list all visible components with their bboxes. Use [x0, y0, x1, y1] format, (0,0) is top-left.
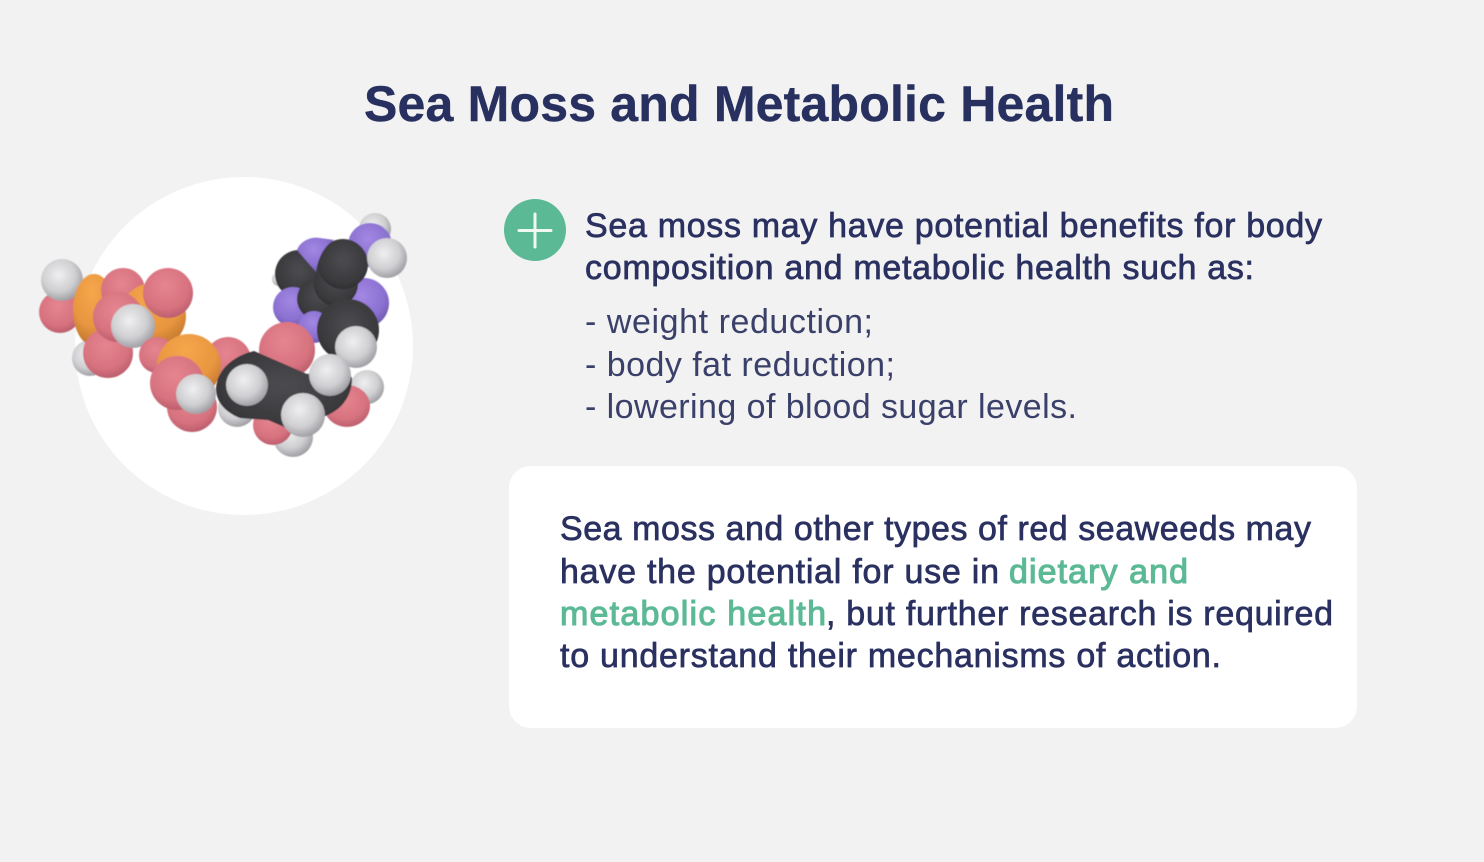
benefits intro text: Sea moss may have potential benefits for body: [585, 207, 1322, 245]
molecule: adenine and ribose: [216, 213, 407, 457]
conclusion text: to understand their mechanisms of action.: [560, 637, 1221, 675]
conclusion text: Sea moss and other types of red seaweeds may: [560, 510, 1311, 548]
benefits intro text: [585, 207, 1322, 287]
icon: green plus circle: [504, 199, 566, 261]
conclusion text: dietary and: [1009, 553, 1188, 591]
benefits list: [585, 303, 1077, 426]
conclusion text: , but further research is required: [826, 595, 1333, 633]
benefits list: - weight reduction;: [585, 303, 873, 341]
panel: conclusion card: [509, 466, 1357, 728]
illustration: molecule on white circle: [39, 177, 413, 515]
benefits list: - lowering of blood sugar levels.: [585, 388, 1077, 426]
conclusion text: [560, 510, 1333, 675]
title: Sea Moss and Metabolic Health: [364, 76, 1114, 132]
benefits list: - body fat reduction;: [585, 346, 895, 384]
benefits intro text: composition and metabolic health such as:: [585, 249, 1254, 287]
conclusion text: have the potential for use in: [560, 553, 999, 591]
conclusion text: metabolic health: [560, 595, 826, 633]
molecule: phosphate chain: [39, 259, 251, 432]
